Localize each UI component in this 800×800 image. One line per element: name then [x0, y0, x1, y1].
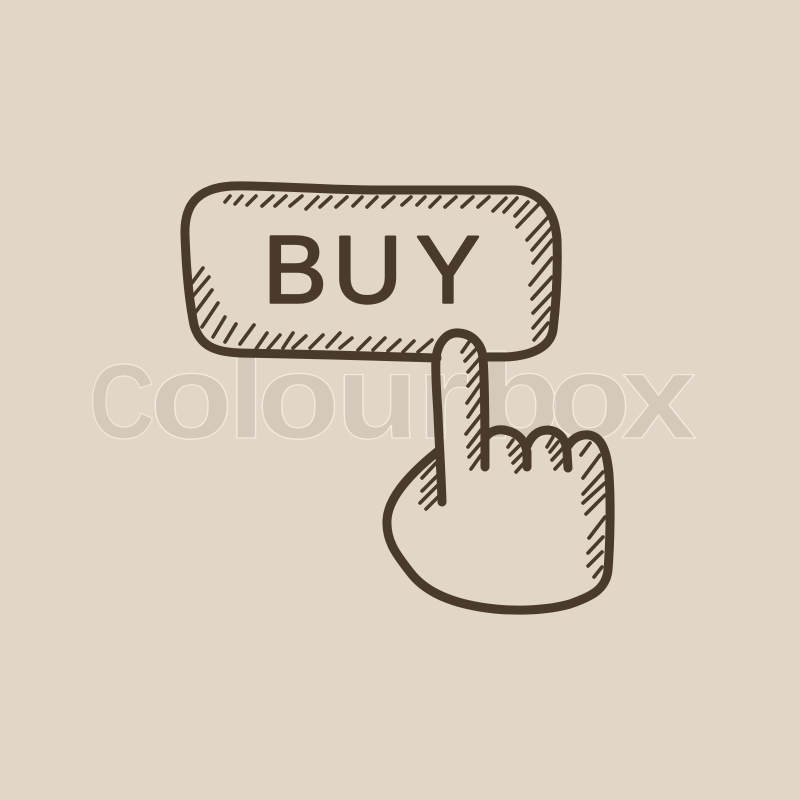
- watermark: C: [89, 343, 155, 460]
- hand hatching: [420, 342, 605, 577]
- finger and palm outline: [387, 333, 610, 610]
- watermark: olourbox: [150, 330, 696, 464]
- icon: pointing hand: [387, 333, 610, 610]
- button outline: [185, 186, 557, 358]
- icon: buy button: [185, 186, 557, 358]
- button hatching: [192, 196, 552, 352]
- button label: BUY: [263, 216, 480, 324]
